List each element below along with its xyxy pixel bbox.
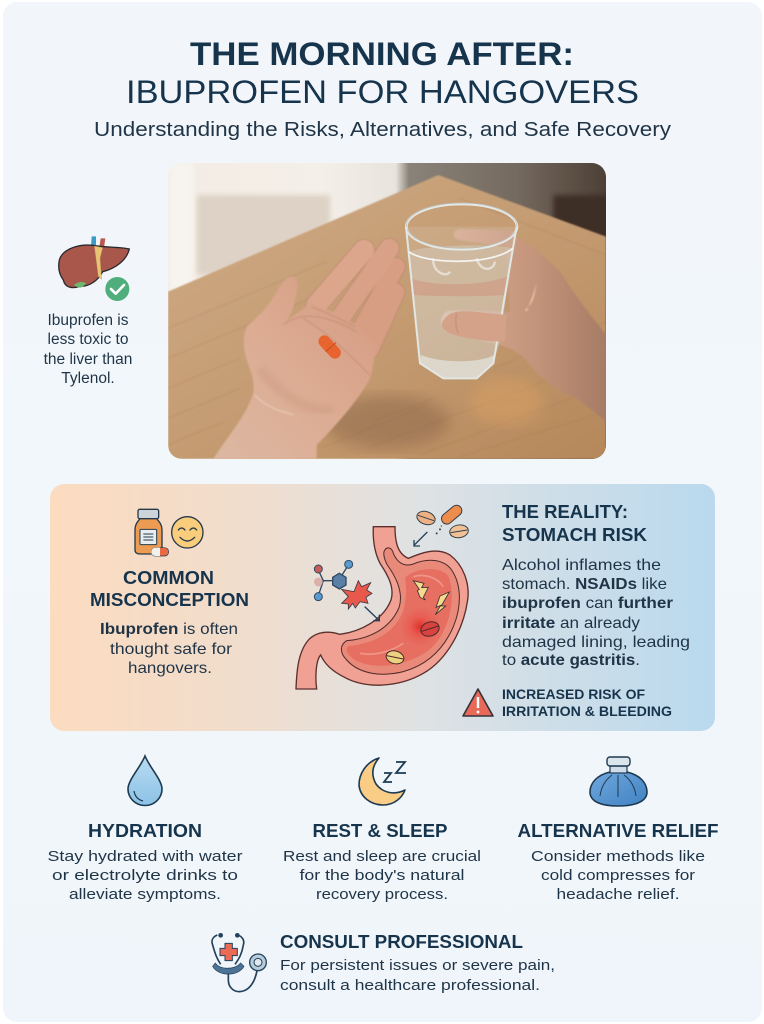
heading: common misconception: COMMON — [123, 567, 214, 588]
icon: pill bottle and smiley — [135, 509, 203, 556]
text: stomach risk explanation: irritate an already — [502, 615, 640, 632]
tip: rest and sleep: for the body's natural — [300, 867, 464, 884]
icon: water drop — [128, 756, 162, 806]
pill — [318, 335, 341, 359]
text: stomach risk explanation: damaged lining, leading — [502, 634, 690, 651]
tip: rest and sleep: REST & SLEEP — [312, 821, 448, 841]
molecule — [318, 565, 348, 597]
liver note: Ibuprofen is — [48, 312, 129, 329]
photo: hand holding a pill next to a glass of water — [168, 162, 610, 459]
icon: cold compress — [590, 757, 647, 806]
text: misconception: Ibuprofen is often — [100, 621, 238, 638]
text: misconception: hangovers. — [128, 660, 212, 677]
icon: warning triangle — [463, 689, 493, 716]
title: IBUPROFEN FOR HANGOVERS — [126, 74, 639, 110]
illustration: inflamed stomach — [296, 503, 469, 689]
tip: hydration: HYDRATION — [88, 821, 202, 841]
tip: consult professional — [212, 932, 555, 994]
liver note — [44, 312, 132, 387]
tip: consult professional: For persistent issues or severe pain, — [280, 957, 555, 974]
text: misconception — [100, 621, 238, 677]
callout: increased risk: INCREASED RISK OF — [502, 687, 645, 702]
left hand — [213, 248, 396, 459]
text: stomach risk explanation — [502, 557, 690, 669]
tip: alternative relief: ALTERNATIVE RELIEF — [518, 821, 718, 841]
text: misconception: thought safe for — [110, 641, 233, 658]
tip: hydration: Stay hydrated with water — [48, 848, 243, 865]
tip: rest and sleep: Rest and sleep are crucial — [283, 848, 481, 865]
tip: rest and sleep — [283, 758, 481, 903]
tip: hydration — [48, 756, 243, 903]
tip: alternative relief: headache relief. — [556, 886, 680, 903]
callout: increased risk — [502, 687, 672, 719]
heading: the reality: STOMACH RISK — [502, 525, 647, 545]
text: stomach risk explanation: Alcohol inflames the — [502, 557, 661, 574]
right hand — [441, 229, 606, 422]
tip: hydration: alleviate symptoms. — [69, 886, 221, 903]
liver note: less toxic to — [48, 331, 128, 348]
subtitle: Understanding the Risks, Alternatives, and Safe Recovery — [94, 119, 671, 141]
heading: the reality — [502, 502, 647, 545]
tip: alternative relief: Consider methods like — [531, 848, 705, 865]
title — [126, 36, 639, 110]
panel: stomach risk — [50, 484, 715, 731]
tip: alternative relief: cold compresses for — [541, 867, 695, 884]
glass — [406, 203, 517, 378]
callout: increased risk: IRRITATION & BLEEDING — [502, 704, 672, 719]
liver note: the liver than — [44, 351, 132, 368]
title: THE MORNING AFTER: — [190, 36, 574, 72]
tip: consult professional: CONSULT PROFESSIONAL — [280, 932, 523, 952]
text: stomach risk explanation: stomach. NSAIDs like — [502, 576, 667, 593]
heading: common misconception: MISCONCEPTION — [90, 589, 249, 610]
icon: moon with z letters — [359, 758, 406, 805]
liver note: Tylenol. — [61, 370, 115, 387]
tip: alternative relief — [518, 757, 718, 903]
heading: the reality: THE REALITY: — [502, 502, 628, 522]
tip: consult professional: consult a healthcare professional. — [280, 977, 540, 994]
text: stomach risk explanation: to acute gastritis . — [502, 652, 640, 669]
tip: hydration: or electrolyte drinks to — [52, 867, 238, 884]
icon: liver with check mark — [59, 236, 129, 301]
heading: common misconception — [90, 567, 249, 610]
text: stomach risk explanation: ibuprofen can further — [502, 595, 673, 612]
tip: rest and sleep: recovery process. — [316, 886, 448, 903]
icon: stethoscope — [212, 933, 266, 992]
pills — [415, 509, 437, 527]
